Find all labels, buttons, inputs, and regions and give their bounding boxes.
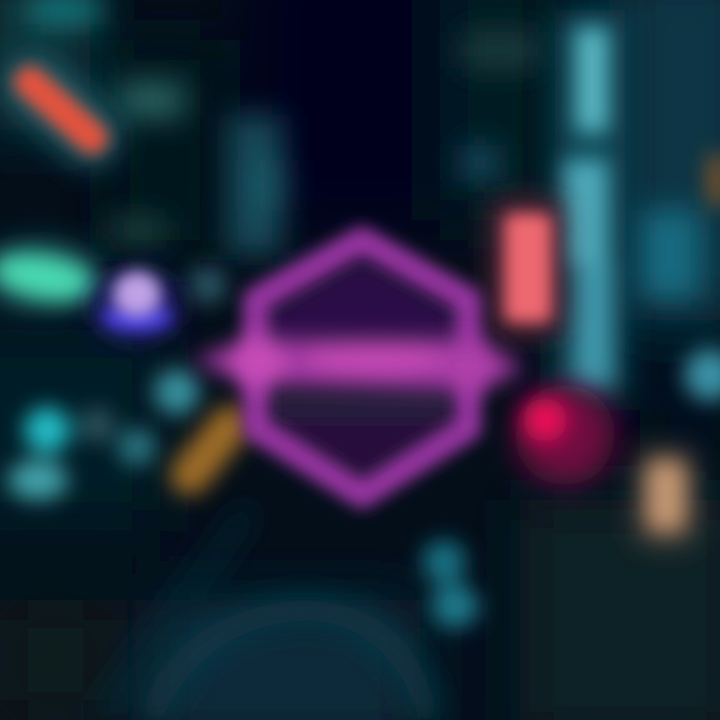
icon: red diagonal neon sign [30, 82, 92, 138]
icon: amber sliver at right edge [708, 155, 720, 205]
icon: scattered teal street lights [8, 266, 227, 500]
icon: magenta neon hexagon sign [192, 240, 524, 495]
street arcs [95, 510, 430, 720]
icon: orange street light [190, 425, 230, 475]
icon: green neon sign [0, 241, 102, 309]
icon: teal road reflections [422, 540, 479, 628]
icon: violet and blue lantern [93, 271, 181, 338]
icon: peach lantern [638, 450, 694, 542]
icon: right side teal light [684, 349, 720, 401]
icon: pale blue vertical neon tube [555, 10, 625, 400]
icon: salmon red vertical sign [492, 200, 562, 335]
horizontal pink banner [192, 336, 524, 392]
icon: crimson round sign [515, 385, 615, 485]
hexagon interior [266, 258, 458, 482]
hexagon outline [256, 240, 468, 495]
